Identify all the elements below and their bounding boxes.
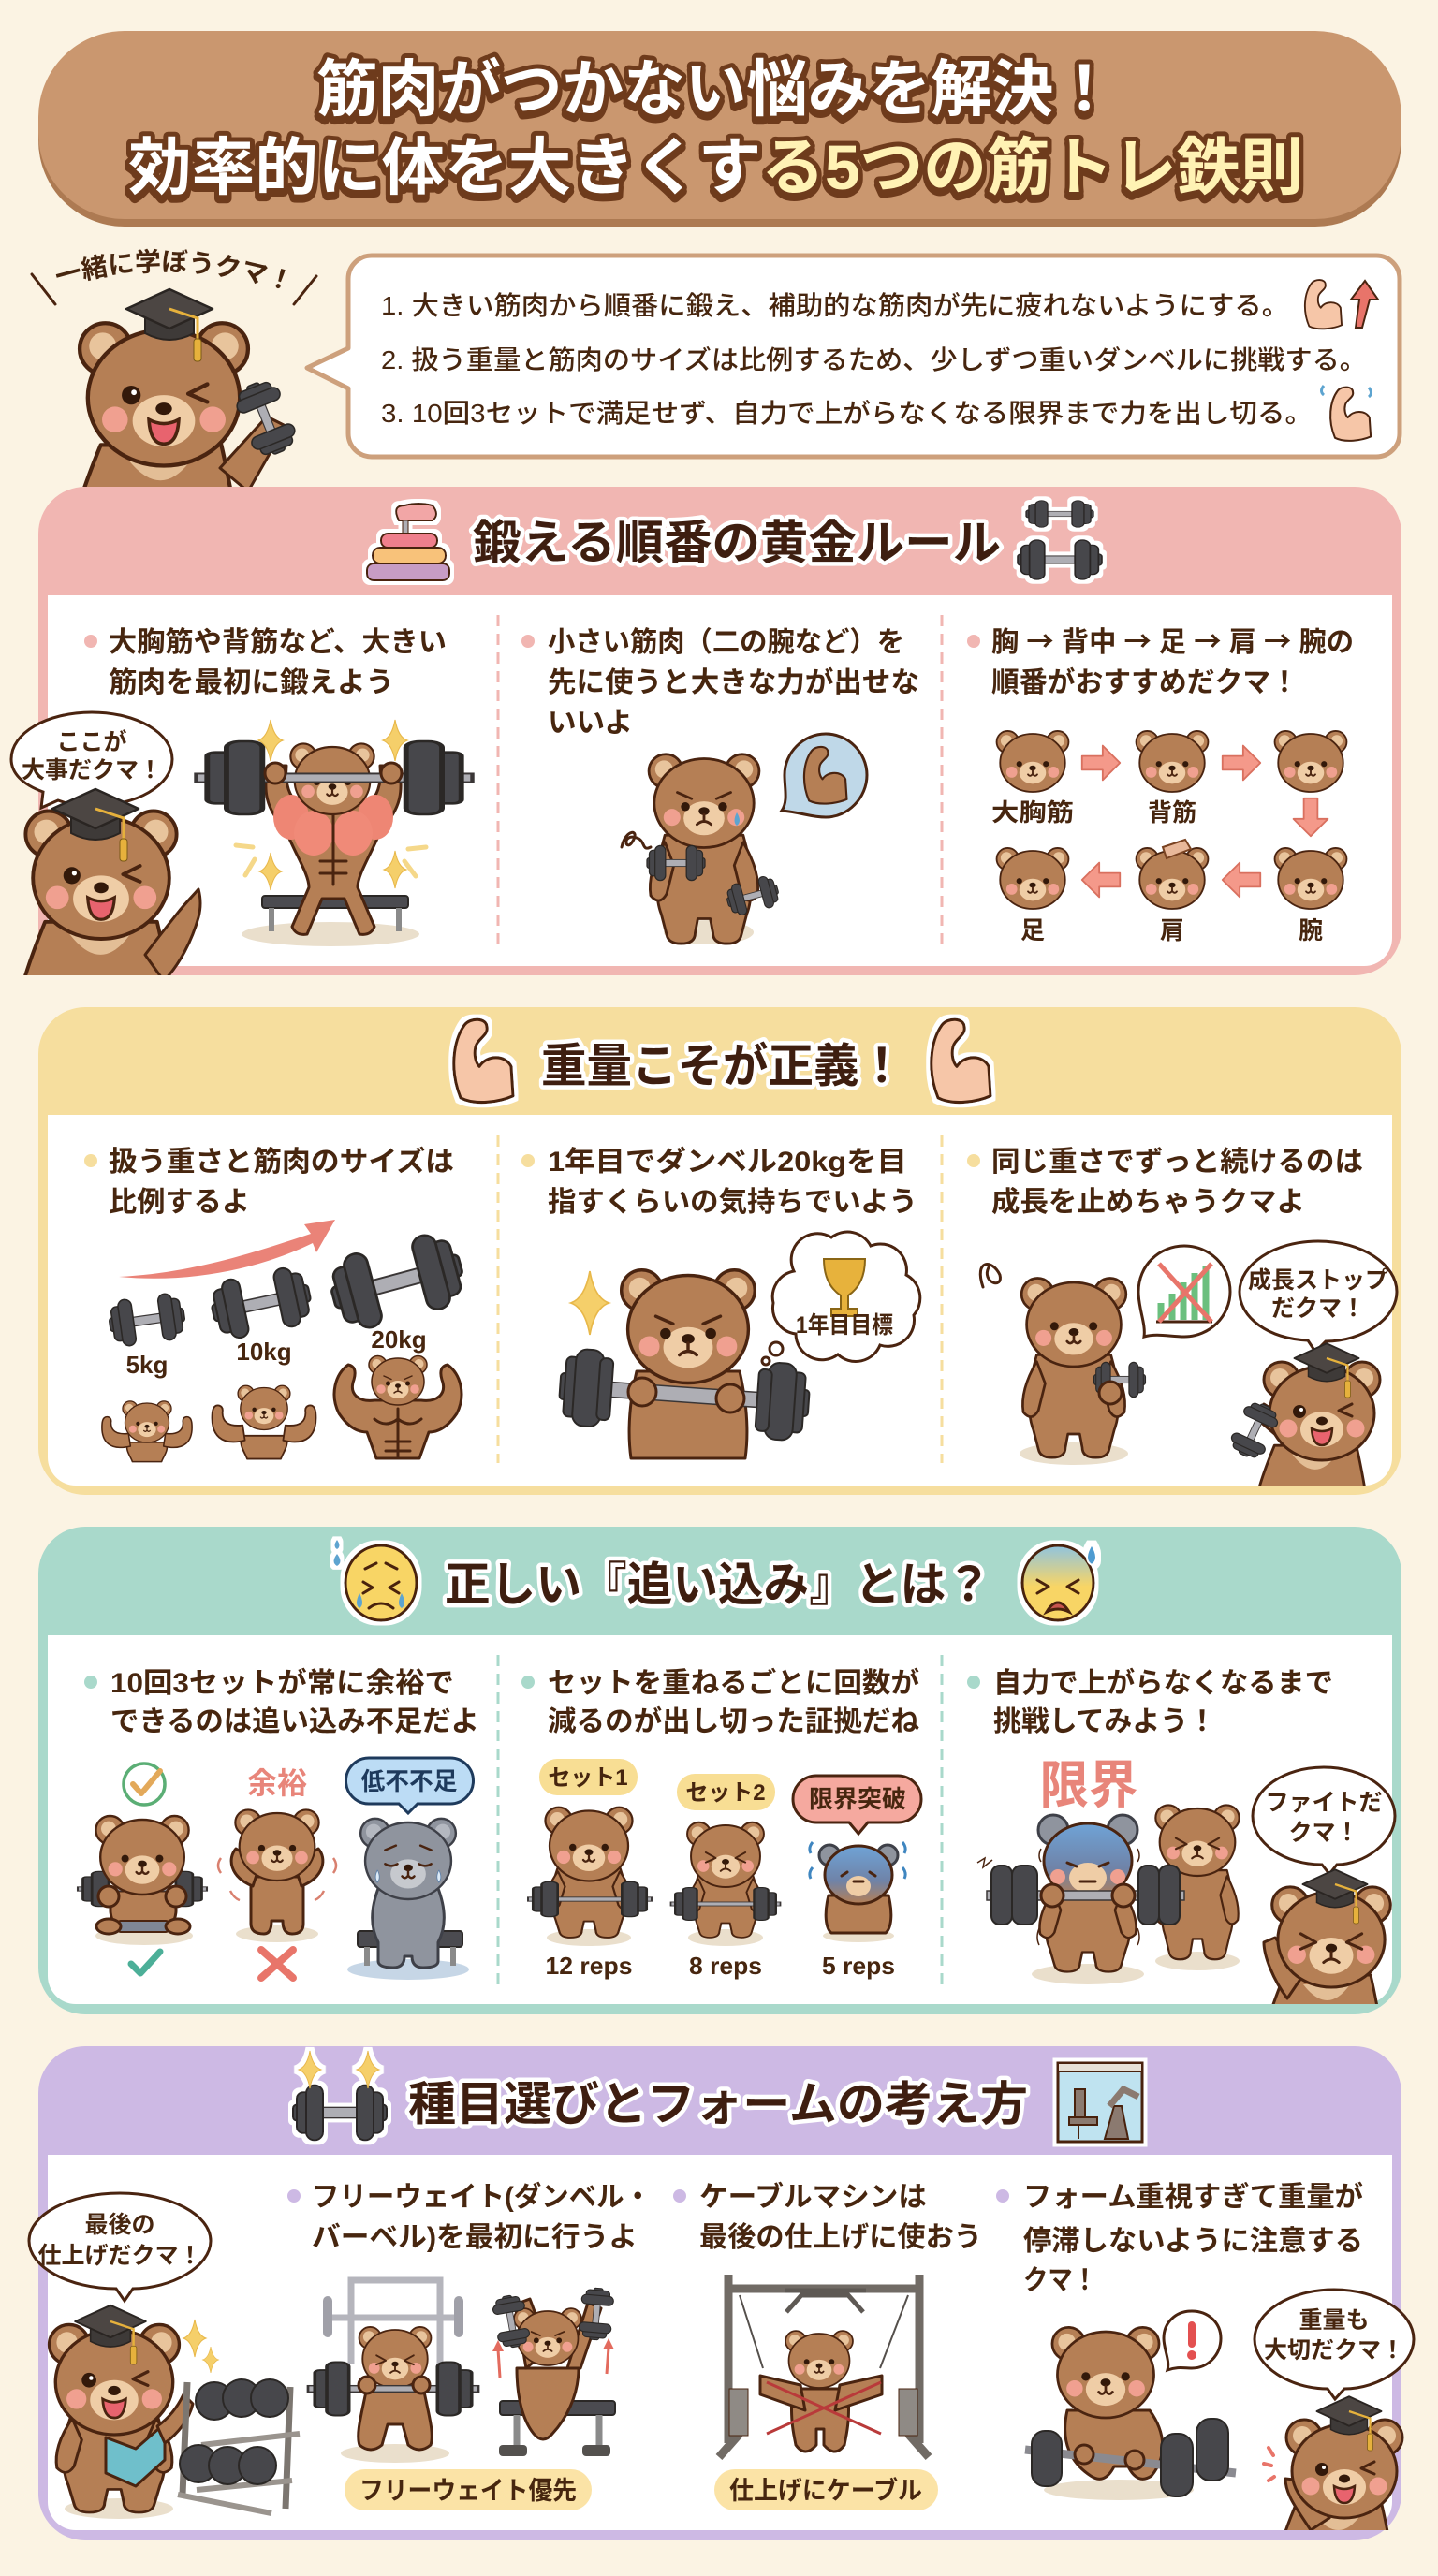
icon: flexed arm left	[454, 1019, 513, 1103]
seated bear with check	[78, 1764, 207, 1973]
bullet text 2: 指すくらいの気持ちでいよう	[548, 1187, 917, 1218]
icon: stacked plates	[367, 504, 449, 580]
bullet text 1: できるのは追い込み不足だよ	[110, 1706, 479, 1737]
dumbbell 20kg	[324, 1228, 470, 1354]
speech: summary rules	[307, 256, 1400, 457]
dumbbell 20kg: 20kg	[371, 1325, 427, 1354]
bear order grid: 肩	[1160, 916, 1184, 944]
limit label and spotting bears: 限界	[1039, 1756, 1138, 1814]
dumbbell 10kg	[207, 1264, 315, 1366]
limit bear: 限界突破	[809, 1785, 906, 1813]
speech: summary rules: 3. 10回3セットで満足せず、自力で上がらなくなる限界まで力を出し切る。	[381, 399, 1313, 428]
bubble: weight matters	[1255, 2290, 1414, 2399]
icon: strained face	[1022, 1544, 1096, 1620]
icon: dumbbell with sparkles	[293, 2051, 387, 2140]
bubble: stop chart	[1138, 1246, 1230, 1337]
bullet text 2: 最後の仕上げに使おう	[699, 2222, 982, 2253]
panel: exercise and form	[29, 2046, 1414, 2576]
limit bear: 5 reps	[822, 1952, 895, 1980]
bullet text 2: ケーブルマシンは	[699, 2181, 927, 2213]
set 1 bear: 12 reps	[545, 1952, 633, 1980]
bullet text 2: 小さい筋肉（二の腕など）を	[548, 627, 904, 658]
heading: 正しい『追い込み』とは？	[445, 1559, 991, 1611]
bullet text 3: クマ！	[1023, 2265, 1097, 2296]
bubble: exclamation	[1164, 2311, 1221, 2370]
struggling bear	[622, 734, 867, 944]
bullet text 2: 先に使うと大きな力が出せな	[548, 666, 919, 698]
bubble: weight matters: 大切だクマ！	[1264, 2337, 1404, 2364]
bullet text 1	[287, 2181, 652, 2253]
dumbbell rack	[178, 2379, 300, 2513]
bullet text 3: 胸 → 背中 → 足 → 肩 → 腕の	[991, 619, 1354, 660]
bullet text 2	[521, 1667, 919, 1737]
bubble: important: 大事だクマ！	[22, 757, 162, 783]
bullet text 3	[967, 619, 1354, 698]
bubble: insufficient: 低不不足	[361, 1767, 457, 1795]
bubble: growth stop: 成長ストップ	[1248, 1267, 1388, 1294]
pill: cable finish: 仕上げにケーブル	[729, 2476, 922, 2505]
icon: flexed arm right	[932, 1019, 990, 1103]
set 2 bear: セット2	[685, 1780, 766, 1806]
bear order grid: 背筋	[1148, 798, 1196, 827]
bullet text 1: 10回3セットが常に余裕で	[110, 1667, 454, 1699]
bubble: weight matters: 重量も	[1299, 2307, 1370, 2334]
pill: free weight first	[345, 2469, 592, 2510]
bullet text 1	[84, 1146, 454, 1218]
heading: 種目選びとフォームの考え方	[408, 2078, 1028, 2130]
bullet text 3	[996, 2181, 1363, 2296]
set 2 bear	[670, 1774, 781, 1980]
bear order grid: 足	[1020, 916, 1045, 944]
bullet text 2: セットを重ねるごとに回数が	[548, 1667, 919, 1699]
heading: 重量こそが正義！	[541, 1040, 904, 1092]
bubble: finishing: 仕上げだクマ！	[37, 2243, 202, 2269]
bullet text 3	[967, 1147, 1363, 1218]
bullet text 3: 同じ重さでずっと続けるのは	[991, 1147, 1363, 1178]
bear holding barbell	[557, 1232, 920, 1458]
bubble: fight: ファイトだ	[1265, 1790, 1383, 1816]
bullet text 3: 停滞しないように注意する	[1023, 2226, 1363, 2257]
small bear	[102, 1401, 192, 1462]
bubble: insufficient	[346, 1758, 473, 1813]
set 1 bear	[528, 1759, 652, 1980]
bullet text 2: 1年目でダンベル20kgを目	[548, 1146, 907, 1178]
mascot with book and rack	[29, 2193, 300, 2519]
dumbbell 5kg: 5kg	[126, 1351, 168, 1379]
gray bear on bench	[346, 1758, 473, 1980]
bubble: fight: クマ！	[1288, 1820, 1359, 1846]
title banner: 効率的に体を大きくする5つの筋トレ鉄則	[128, 133, 1303, 203]
rising arrow	[119, 1220, 335, 1279]
bubble: arm	[782, 734, 867, 817]
bullet text 3: フォーム重視すぎて重量が	[1023, 2181, 1363, 2213]
bullet text 3: 自力で上がらなくなるまで	[993, 1667, 1333, 1699]
bubble: finishing: 最後の	[84, 2212, 155, 2238]
title banner	[38, 31, 1401, 227]
bear order grid	[991, 731, 1346, 944]
bear with barbell in rack	[308, 2280, 478, 2463]
tired bear	[980, 1246, 1230, 1465]
deadlift bear	[1025, 2311, 1236, 2500]
bullet text 3: 順番がおすすめだクマ！	[991, 666, 1299, 698]
panel: order rule	[11, 487, 1401, 1024]
bullet text 2	[521, 627, 919, 739]
thought bubble: trophy: 1年目目標	[796, 1312, 893, 1339]
set 2 bear: 8 reps	[689, 1952, 762, 1980]
bubble: important	[11, 712, 172, 808]
icon: gym mirror	[1058, 2063, 1142, 2142]
cable machine bear	[719, 2275, 929, 2457]
set 1 bear: セット1	[548, 1765, 628, 1791]
icon: dumbbells	[1018, 501, 1102, 579]
book	[106, 2423, 165, 2486]
limit bear	[793, 1776, 921, 1980]
bullet text 1: バーベル)を最初に行うよ	[312, 2222, 638, 2253]
mascot with dumbbell	[1230, 1239, 1399, 1486]
limit label and spotting bears	[977, 1756, 1240, 1984]
bullet text 3: 挑戦してみよう！	[993, 1706, 1216, 1737]
heading: 鍛える順番の黄金ルール	[473, 517, 1001, 569]
bubble: fight	[1253, 1767, 1395, 1874]
speech: summary rules: 2. 扱う重量と筋肉のサイズは比例するため、少しずつ重いダンベルに挑戦する。	[381, 345, 1367, 374]
speech: summary rules: 1. 大きい筋肉から順番に鍛え、補助的な筋肉が先に疲れないようにする。	[381, 291, 1289, 320]
relaxed bear with cross	[218, 1766, 336, 1978]
medium bear	[213, 1385, 315, 1459]
bullet text 1: 扱う重さと筋肉のサイズは	[109, 1146, 454, 1178]
bullet text 3: 成長を止めちゃうクマよ	[991, 1187, 1305, 1218]
bullet text 1	[84, 627, 447, 698]
icon: arm with up arrow	[1305, 280, 1378, 329]
dumbbell 5kg	[107, 1292, 187, 1379]
dumbbell 10kg: 10kg	[236, 1338, 292, 1366]
bubble: growth stop	[1240, 1241, 1397, 1352]
mascot warning	[1253, 2288, 1416, 2530]
icon: arm with sweat	[1322, 386, 1371, 441]
bear order grid: 大胸筋	[991, 798, 1074, 827]
bullet text 2	[521, 1146, 917, 1218]
bullet text 1: 大胸筋や背筋など、大きい	[109, 627, 447, 658]
bear with dumbbell	[77, 288, 296, 487]
bullet text 3	[967, 1667, 1333, 1737]
bubble: important: ここが	[56, 728, 127, 755]
bullet text 1: 比例するよ	[109, 1187, 250, 1218]
muscular bear	[334, 1355, 462, 1458]
bullet text 2	[673, 2181, 982, 2253]
relaxed bear with cross: 余裕	[247, 1766, 307, 1800]
bear bench press	[197, 720, 472, 946]
bullet text 2: 減るのが出し切った証拠だね	[548, 1705, 919, 1737]
pill: free weight first: フリーウェイト優先	[360, 2477, 577, 2505]
mascot pointing	[9, 711, 202, 975]
bear order grid: 腕	[1299, 916, 1323, 944]
panel: true failure	[38, 1527, 1401, 2054]
bullet text 1	[84, 1667, 479, 1737]
bullet text 2: いいよ	[548, 708, 633, 739]
bubble: growth stop: だクマ！	[1271, 1295, 1365, 1322]
panel: weight is justice	[38, 1007, 1401, 1520]
mascot greeting bear	[30, 249, 318, 487]
bullet text 1: 筋肉を最初に鍛えよう	[109, 667, 394, 698]
pill: cable finish	[714, 2469, 938, 2510]
greeting text: 一緒に学ぼうクマ！	[56, 249, 286, 288]
icon: crying face	[333, 1540, 417, 1620]
mascot cheering	[1251, 1765, 1397, 2004]
bullet text 1: フリーウェイト(ダンベル・	[312, 2181, 652, 2213]
bubble: finishing	[29, 2193, 211, 2301]
thought bubble: trophy	[762, 1232, 920, 1365]
bear seated press	[491, 2287, 615, 2456]
title banner: 筋肉がつかない悩みを解決！	[316, 54, 1115, 124]
